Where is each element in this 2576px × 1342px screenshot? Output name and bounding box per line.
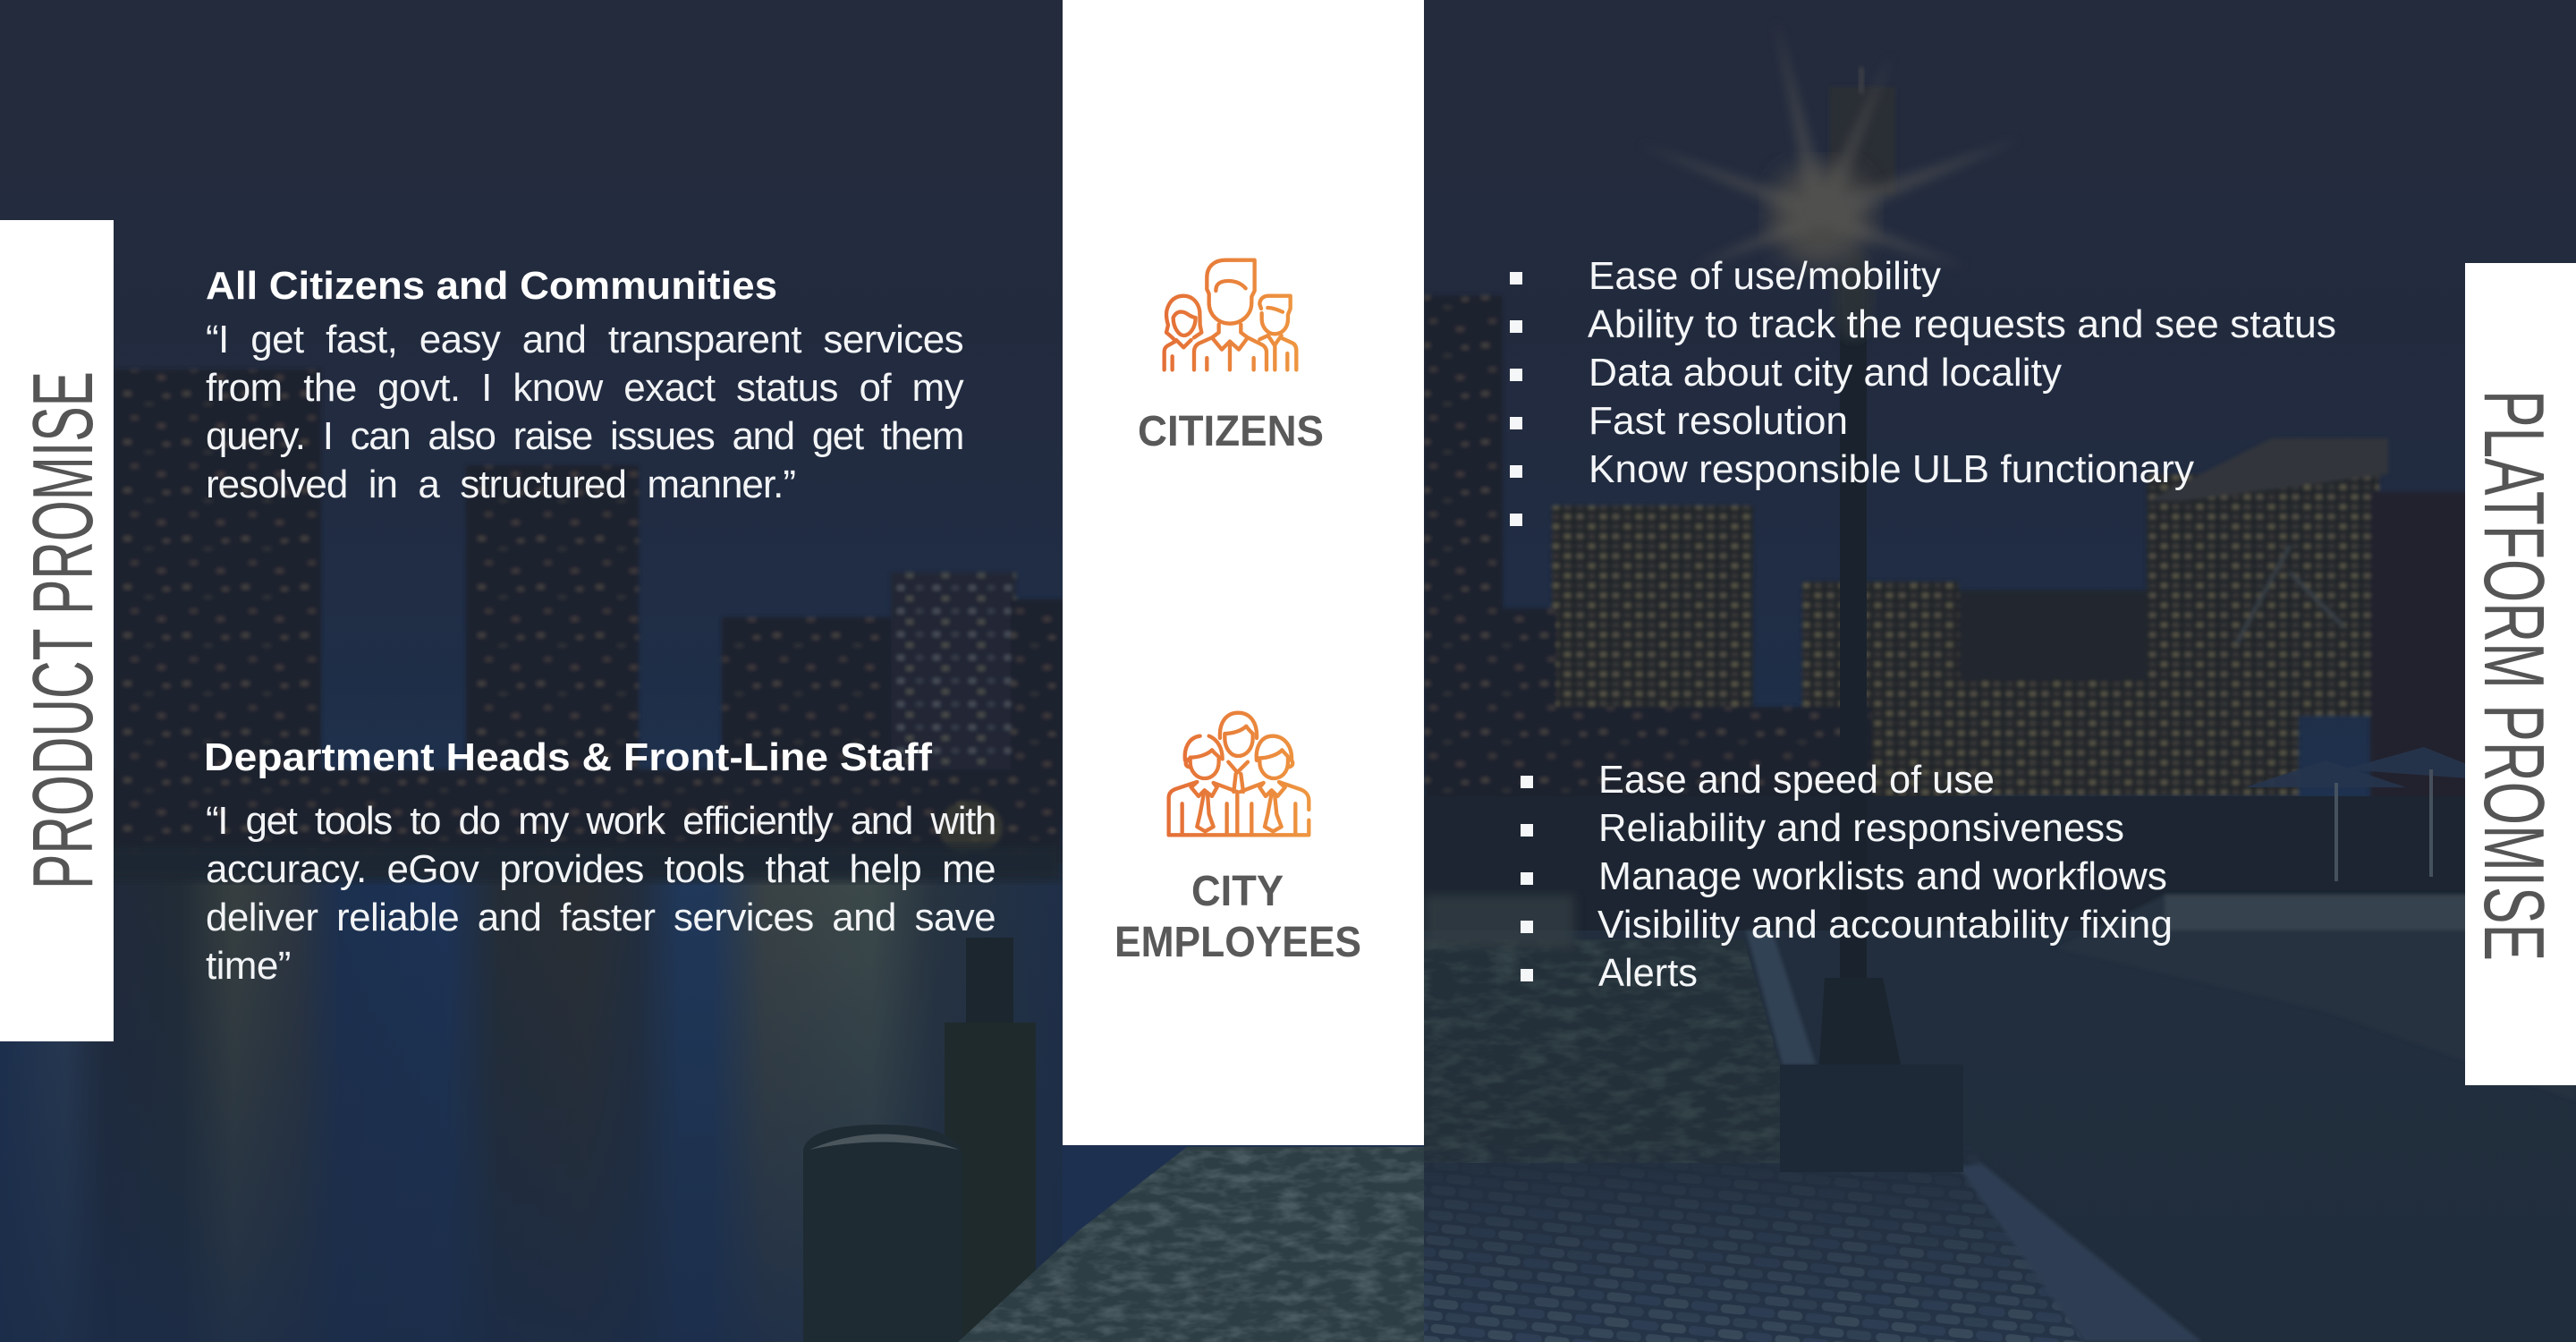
list: city employee platform promises: Alerts	[1598, 951, 1698, 995]
right skyline	[1424, 295, 2469, 832]
clock tower and light star	[1637, 18, 2021, 268]
list: citizens platform promises: Data about city and locality	[1589, 351, 2062, 395]
text block: citizen quote: from the govt. I know exact status of my	[206, 366, 963, 410]
list: citizens platform promises	[1510, 254, 2336, 526]
lamp post	[1780, 251, 1963, 1172]
list: city employee platform promises	[1521, 758, 2173, 995]
left skyline	[0, 369, 1064, 868]
text block: employee quote: deliver reliable and faster services and save	[206, 896, 996, 939]
list: city employee platform promises: Visibility and accountability fixing	[1597, 903, 2173, 947]
text block: citizen quote: resolved in a structured manner.”	[206, 463, 795, 506]
text block: employee quote	[206, 799, 996, 988]
icon: citizens group	[1165, 260, 1296, 369]
list: citizens platform promises: Ability to track the requests and see status	[1588, 302, 2336, 346]
list: citizens platform promises: Ease of use/mobility	[1589, 254, 1941, 298]
text block: citizen quote	[206, 318, 964, 506]
label: city: CITY	[1191, 868, 1284, 915]
title: platform promise: PLATFORM PROMISE	[2466, 390, 2562, 961]
text block: citizen quote: “I get fast, easy and transparent services	[206, 318, 963, 361]
pilings	[803, 938, 1036, 1342]
text block: employee quote: accuracy. eGov provides tools that help me	[206, 847, 996, 891]
promenade ground	[1424, 796, 2576, 1342]
text block: citizen quote: query. I can also raise issues and get them	[206, 414, 963, 458]
label: employees: EMPLOYEES	[1114, 919, 1361, 966]
heading: department heads and front-line staff: Department Heads & Front-Line Staff	[204, 735, 932, 779]
title: product promise: PRODUCT PROMISE	[15, 371, 111, 889]
panel: center audience column	[1063, 0, 1424, 1145]
panel: product promise side tab	[0, 220, 114, 1041]
list: city employee platform promises: Reliability and responsiveness	[1598, 806, 2124, 850]
label: citizens: CITIZENS	[1138, 408, 1324, 455]
text block: employee quote: “I get tools to do my work efficiently and with	[206, 799, 996, 843]
umbrellas	[2245, 747, 2469, 881]
icon: city employees group	[1169, 713, 1309, 835]
list: city employee platform promises: Manage worklists and workflows	[1598, 854, 2167, 898]
water	[0, 845, 1188, 1342]
text block: employee quote: time”	[206, 944, 291, 988]
list: city employee platform promises: Ease and speed of use	[1598, 758, 1995, 802]
panel: platform promise side tab	[2465, 263, 2576, 1085]
pier pavement	[958, 1147, 1431, 1342]
list: citizens platform promises: Fast resolution	[1589, 399, 1848, 443]
heading: all citizens and communities: All Citizens and Communities	[206, 264, 777, 308]
list: citizens platform promises: Know responsible ULB functionary	[1589, 447, 2194, 491]
